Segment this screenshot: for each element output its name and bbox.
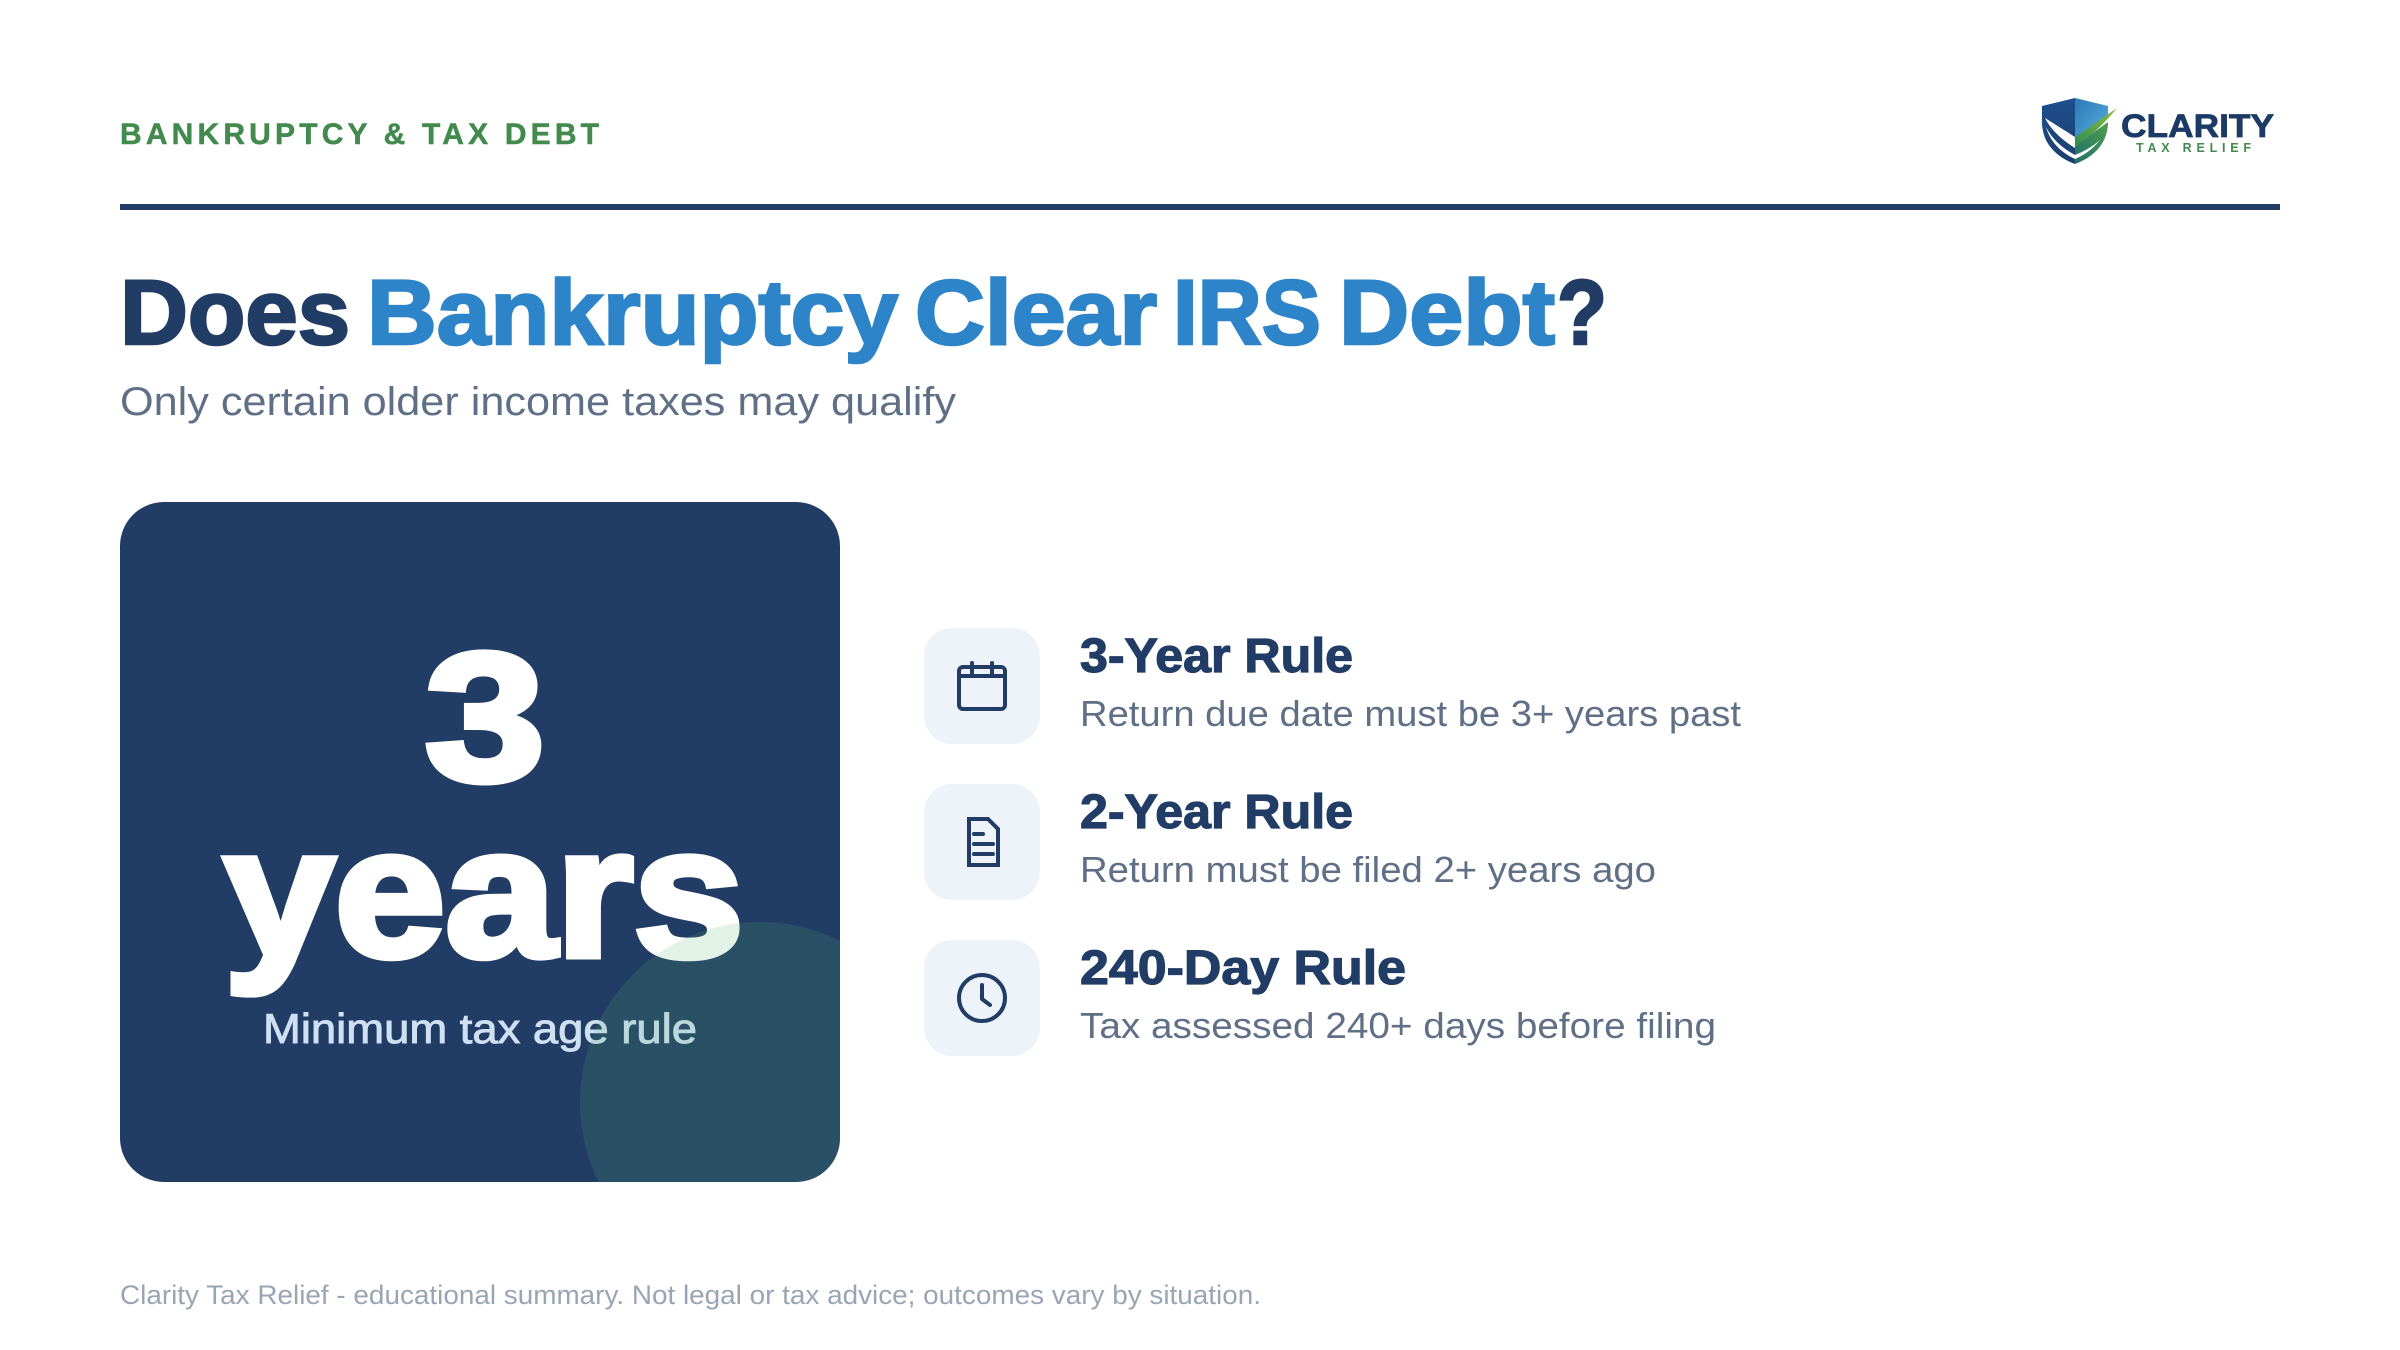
icon: document [924, 784, 1040, 900]
rule row: 3-year rule [924, 628, 1741, 744]
title: Debt [1339, 262, 1555, 364]
card background [120, 502, 840, 1182]
caption: Minimum tax age rule [263, 1005, 697, 1052]
heading: 2-Year Rule [1080, 786, 1353, 839]
heading: 3-Year Rule [1080, 630, 1353, 683]
icon: shield with check [2042, 98, 2117, 164]
description: Return due date must be 3+ years past [1080, 693, 1741, 734]
header rule [120, 204, 2280, 210]
description: Tax assessed 240+ days before filing [1080, 1005, 1716, 1046]
panel: 3 years stat card [120, 502, 840, 1182]
icon: calendar [924, 628, 1040, 744]
logo: Clarity Tax Relief [2042, 98, 2274, 164]
rule row: 240-day rule [924, 940, 1716, 1056]
title: Bankruptcy [367, 262, 898, 364]
decorative circle [580, 922, 840, 1182]
eyebrow label: BANKRUPTCY & TAX DEBT [120, 118, 599, 151]
rule row: 2-year rule [924, 784, 1656, 900]
title: IRS [1173, 262, 1321, 364]
icon: clock [924, 940, 1040, 1056]
title: Clear [915, 262, 1157, 364]
description: Return must be filed 2+ years ago [1080, 849, 1656, 890]
big number: 3 [425, 615, 545, 819]
logo tagline: TAX RELIEF [2136, 141, 2251, 155]
heading: 240-Day Rule [1080, 942, 1406, 995]
title: ? [1557, 262, 1607, 364]
logo wordmark: CLARITY [2121, 108, 2274, 144]
subtitle: Only certain older income taxes may qualify [120, 380, 956, 424]
title [120, 262, 1607, 364]
title: Does [120, 262, 350, 364]
footer disclaimer: Clarity Tax Relief - educational summary. Not legal or tax advice; outcomes vary by situation. [120, 1280, 1261, 1310]
big unit: years [224, 789, 744, 995]
